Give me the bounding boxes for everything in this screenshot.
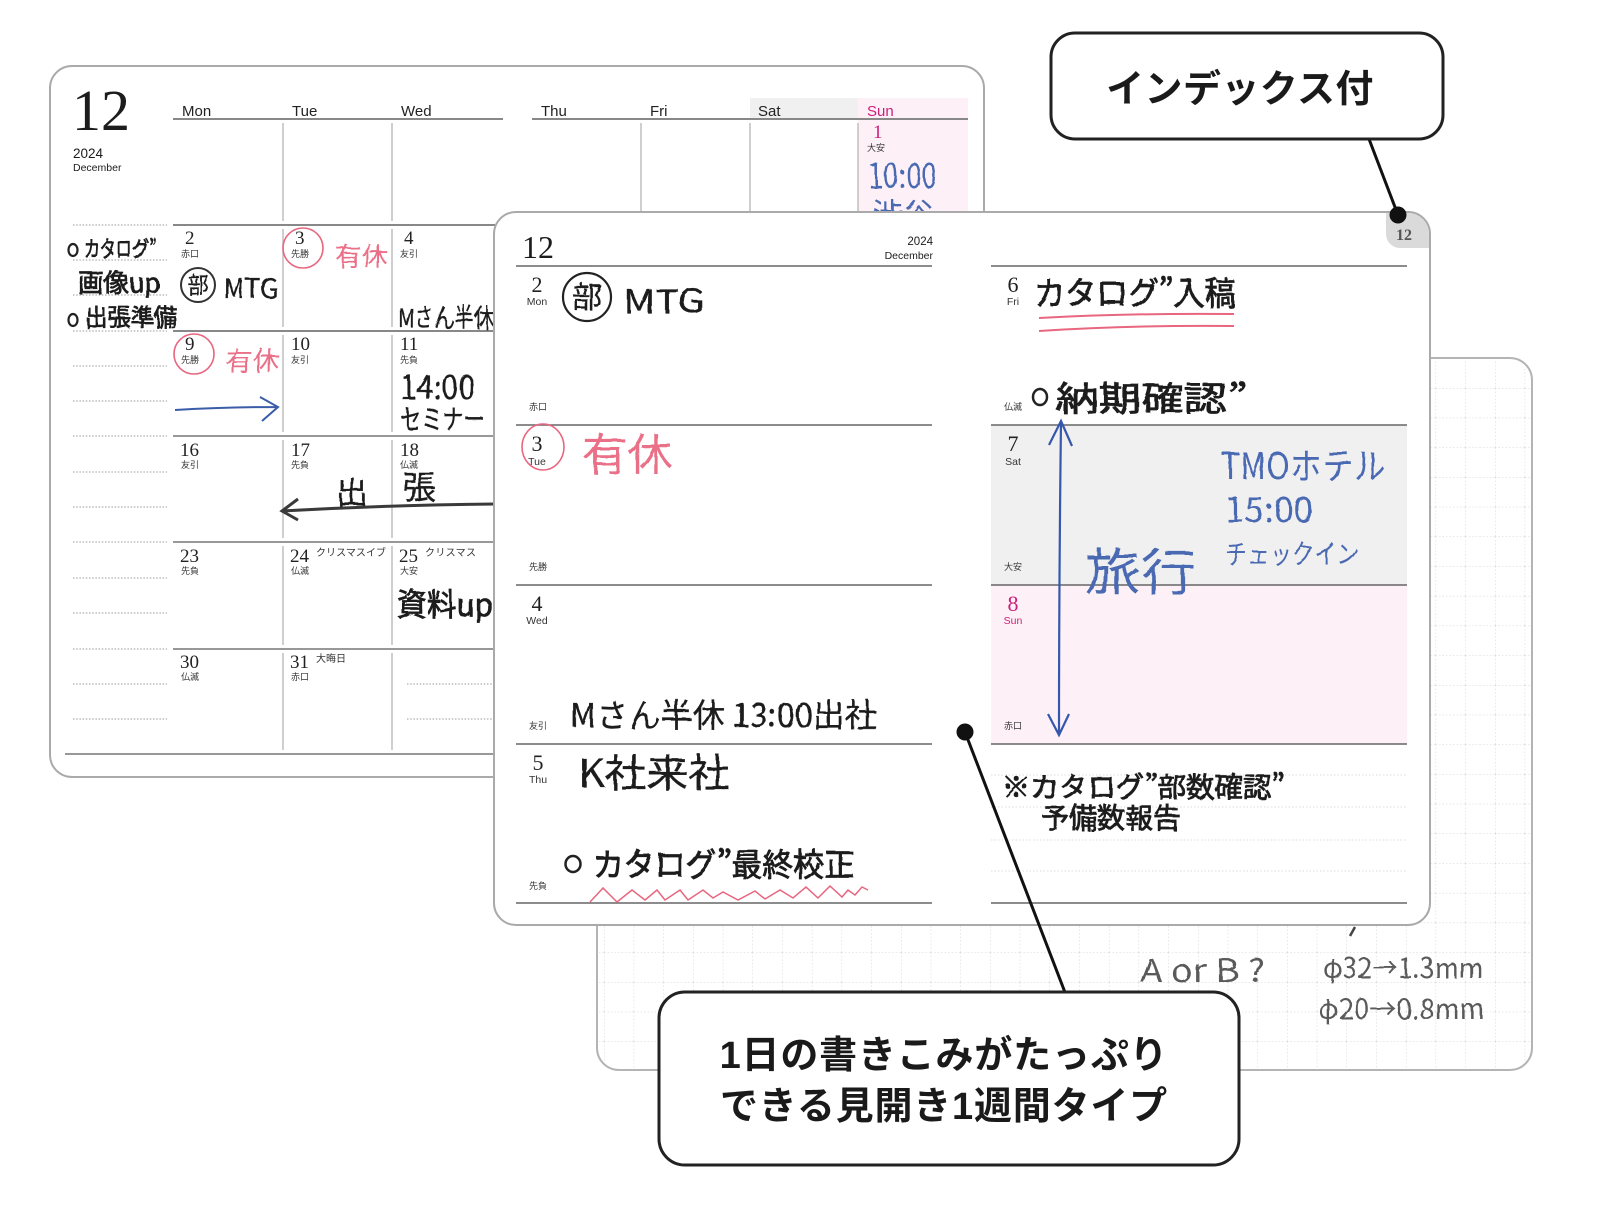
- spread heading: 2024: [907, 236, 934, 248]
- date cells: sixth week: 31: [290, 652, 309, 673]
- callout: index tab: [1051, 33, 1443, 139]
- date cells: fifth week: 仏滅: [291, 565, 309, 576]
- handwritten: half-day note: Mさん半休: [398, 298, 494, 335]
- date cells: fifth week: 先負: [181, 565, 199, 576]
- handwritten memo list: 画像up: [78, 263, 160, 300]
- handwritten note: 20 to 0.8mm: φ20→0.8mm: [1318, 988, 1485, 1028]
- handwritten: seminar at 14:00: [400, 361, 485, 437]
- index tab: [1386, 213, 1429, 248]
- date cells: first week: 1: [873, 122, 882, 143]
- day: Wednesday 4: [526, 591, 548, 731]
- panel: monthly calendar page: [50, 66, 984, 777]
- day: Saturday 7: 大安: [1004, 561, 1022, 572]
- weekend column shading: [750, 98, 968, 212]
- handwritten: upload materials: 資料up: [397, 580, 493, 625]
- arrow: leader from index callout to tab: [1369, 139, 1406, 224]
- handwritten: final catalog proof: カタログ”最終校正: [593, 840, 855, 886]
- day: Tuesday 3: 3: [532, 431, 542, 456]
- spread heading: 12: [522, 229, 554, 265]
- spread heading: [522, 229, 934, 265]
- day: Sunday 8: Sun: [1004, 615, 1022, 627]
- handwritten: 10:00 Shibuya: 渋谷: [872, 190, 934, 236]
- date cells: fourth week: 仏滅: [400, 459, 418, 470]
- date cells: fourth week: 友引: [181, 459, 199, 470]
- date cells: fifth week: 25: [399, 546, 418, 567]
- day: Tuesday 3: [528, 431, 547, 572]
- handwritten: hotel check-in note: TMOホテル: [1221, 438, 1386, 490]
- handwritten: paid leave: [522, 419, 673, 483]
- date cells: fifth week: クリスマス: [425, 547, 476, 559]
- date cells: second week: [181, 228, 418, 259]
- day: Thursday 5: [529, 750, 547, 891]
- handwritten memo list: 出張準備: [85, 298, 177, 333]
- date cells: first week: 大安: [867, 142, 885, 153]
- date cells: fifth week: クリスマスイブ: [316, 546, 386, 559]
- handwritten: department meeting: MTG: [223, 267, 278, 306]
- date cells: second week: 4: [404, 228, 414, 249]
- date cells: fourth week: [180, 440, 419, 470]
- handwritten: paid leave: 有休: [582, 419, 673, 483]
- callout: weekly spread type: 1日の書きこみがたっぷり: [720, 1035, 1168, 1077]
- spread heading: December: [885, 250, 934, 262]
- handwritten: department meeting: 部: [187, 268, 209, 300]
- date cells: fourth week: 18: [400, 440, 419, 461]
- handwritten: 10:00 Shibuya: [868, 149, 937, 236]
- callout: weekly spread type: [659, 992, 1239, 1165]
- date cells: first week: [867, 122, 885, 153]
- handwritten: catalog submission: カタログ”入稿: [1034, 267, 1236, 315]
- handwritten: seminar at 14:00: セミナー: [400, 398, 485, 437]
- callout: index tab: インデックス付: [1106, 68, 1374, 111]
- handwritten: hotel check-in note: チェックイン: [1225, 533, 1359, 572]
- handwritten note: 32 to 1.3mm: φ32→1.3mm: [1323, 947, 1483, 987]
- handwritten: paid leave on the 9th: [174, 334, 280, 379]
- weekday header: Sat: [758, 103, 781, 120]
- weekday header: [182, 103, 894, 120]
- day: Friday 6: 6: [1008, 272, 1018, 297]
- date cells: third week: 11: [400, 334, 418, 355]
- date cells: fourth week: 先負: [291, 459, 309, 470]
- month heading: 12: [72, 78, 130, 143]
- panel: grid notes page: [597, 358, 1532, 1070]
- date cells: sixth week: 仏滅: [181, 671, 199, 682]
- date cells: third week: 9: [185, 334, 194, 355]
- date cells: third week: 先負: [400, 354, 418, 365]
- weekday header: Thu: [541, 103, 567, 120]
- day: Friday 6: Fri: [1007, 296, 1019, 308]
- day: Wednesday 4: 4: [532, 591, 542, 616]
- weekday header: Fri: [650, 103, 668, 120]
- date cells: second week: 先勝: [291, 248, 309, 259]
- handwritten: catalog copies check: ※カタログ”部数確認”: [1002, 766, 1285, 806]
- day: Monday 2: 赤口: [529, 402, 547, 412]
- handwritten: hotel check-in note: 15:00: [1225, 483, 1313, 532]
- day: Wednesday 4: 友引: [529, 720, 547, 731]
- day: Sunday 8: 8: [1008, 591, 1018, 616]
- weekday header: Tue: [292, 103, 317, 120]
- day: Tuesday 3: 先勝: [529, 561, 547, 572]
- month heading: [72, 78, 130, 174]
- month heading: December: [73, 162, 122, 174]
- handwritten: paid leave on the 3rd: [283, 228, 388, 274]
- arrow: blue right arrow: [175, 397, 278, 421]
- handwritten: catalog copies check: [1002, 766, 1285, 837]
- handwritten: company K visit: K社来社: [578, 743, 730, 799]
- handwritten: 10:00 Shibuya: 10:00: [868, 149, 937, 198]
- handwritten: paid leave on the 9th: 有休: [225, 340, 280, 379]
- date cells: second week: 3: [295, 228, 304, 249]
- date cells: sixth week: [180, 652, 346, 682]
- day: Sunday 8: 赤口: [1004, 721, 1022, 731]
- panel: weekly spread page: [494, 212, 1430, 925]
- handwritten: department meeting: [181, 267, 278, 306]
- handwritten: business trip with arrow: [282, 461, 495, 520]
- handwritten: hotel check-in note: [1221, 438, 1386, 572]
- handwritten: business trip with arrow: 出: [336, 468, 368, 514]
- handwritten: half-day note: Mさん半休 13:00出社: [570, 689, 877, 737]
- red double underline: [1039, 314, 1234, 331]
- handwritten: department meeting: [563, 273, 705, 323]
- date cells: sixth week: 赤口: [291, 672, 309, 682]
- day: Friday 6: 仏滅: [1004, 401, 1022, 412]
- date cells: third week: [181, 334, 418, 365]
- day: Friday 6: [1004, 272, 1022, 412]
- day: Tuesday 3: Tue: [528, 456, 546, 468]
- date cells: fifth week: 24: [290, 546, 310, 567]
- handwritten: delivery date check: 納期確認”: [1056, 372, 1247, 421]
- date cells: fourth week: 16: [180, 440, 199, 461]
- date cells: fifth week: 大安: [400, 565, 418, 576]
- weekday header: Mon: [182, 103, 211, 120]
- weekday header: Sun: [867, 103, 894, 120]
- day: Saturday 7: Sat: [1005, 456, 1021, 468]
- handwritten: travel: 旅行: [1085, 533, 1196, 605]
- day: Saturday 7: 7: [1008, 431, 1018, 456]
- day: Thursday 5: 5: [532, 750, 544, 775]
- handwritten: department meeting: 部: [572, 273, 602, 317]
- arrow: blue two-way trip arrow: [1048, 421, 1072, 735]
- date cells: sixth week: 30: [180, 652, 199, 673]
- day: Monday 2: Mon: [527, 296, 547, 308]
- date cells: fifth week: [180, 546, 476, 576]
- handwritten: paid leave on the 3rd: 有休: [335, 237, 388, 274]
- callout: weekly spread type: できる見開き1週間タイプ: [720, 1086, 1168, 1128]
- weekend row shading: [991, 425, 1407, 744]
- index tab: 12: [1396, 227, 1412, 244]
- date cells: fifth week: 23: [180, 546, 199, 567]
- month heading: 2024: [73, 146, 104, 161]
- day: Monday 2: [527, 272, 547, 412]
- date cells: sixth week: 大晦日: [316, 652, 346, 665]
- weekday header: Wed: [401, 103, 432, 120]
- date cells: fourth week: 17: [291, 440, 310, 461]
- handwritten memo list: カタログ”: [84, 232, 156, 264]
- handwritten memo list: [68, 232, 177, 333]
- day: Monday 2: 2: [532, 272, 542, 297]
- handwritten: catalog copies check: 予備数報告: [1041, 797, 1181, 837]
- day: Saturday 7: [1004, 431, 1022, 572]
- handwritten: business trip with arrow: 張: [403, 461, 436, 509]
- day: Sunday 8: [1004, 591, 1022, 731]
- red zigzag underline: [590, 886, 868, 902]
- day: Wednesday 4: Wed: [526, 615, 548, 627]
- arrow: leader from spread callout to page: [956, 724, 1066, 995]
- handwritten note: A or B?: A or B ?: [1140, 946, 1265, 992]
- day: Thursday 5: 先負: [529, 880, 547, 891]
- date cells: second week: 2: [185, 228, 194, 249]
- handwritten: department meeting: MTG: [623, 275, 705, 323]
- date cells: second week: 友引: [400, 248, 418, 259]
- day: Thursday 5: Thu: [529, 774, 547, 786]
- handwritten: seminar at 14:00: 14:00: [400, 361, 475, 409]
- date cells: third week: 10: [291, 334, 310, 355]
- date cells: third week: 友引: [291, 354, 309, 365]
- date cells: second week: 赤口: [181, 249, 199, 259]
- date cells: third week: 先勝: [181, 354, 199, 365]
